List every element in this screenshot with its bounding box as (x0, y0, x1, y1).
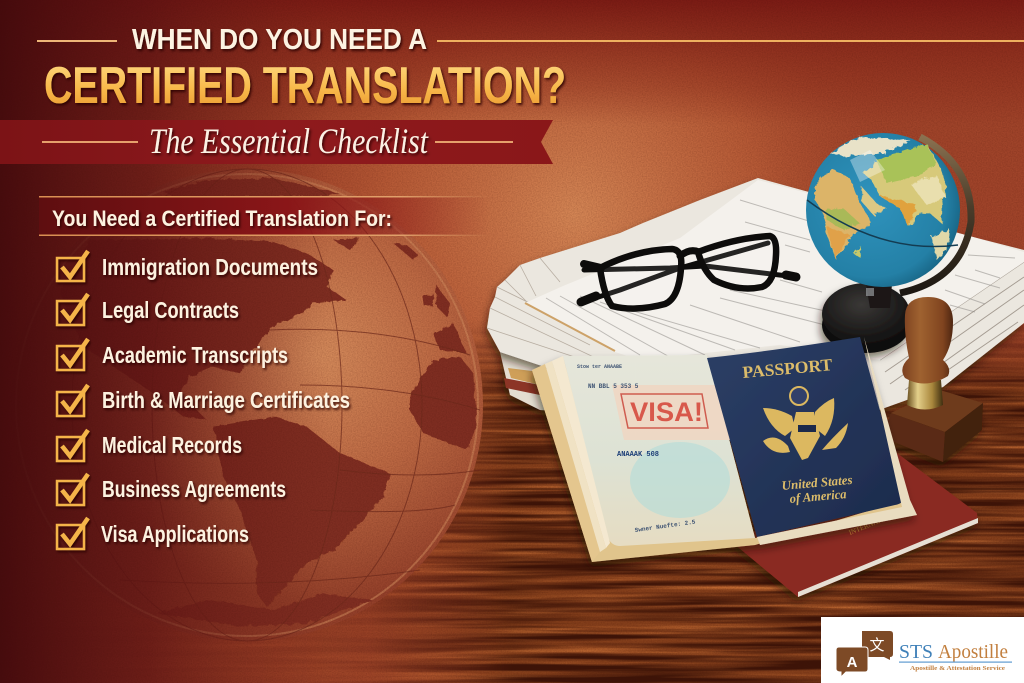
map grid lines (72, 169, 480, 641)
globe equator band (807, 200, 958, 247)
visa page labels: Swner Nuefte: 2.5 (634, 518, 696, 534)
item: immigration documents (57, 251, 318, 281)
sheet text lines (546, 200, 1015, 360)
globe sphere (806, 133, 960, 287)
visa page labels: Stow ter ANAABE (577, 364, 622, 370)
item: academic transcripts (57, 339, 288, 370)
open passport (532, 337, 917, 562)
item: birth and marriage certificates: Birth & Marriage Certificates (102, 387, 350, 413)
passport cover text: PASSPORT (742, 355, 834, 382)
visa page (563, 355, 755, 546)
stamp block (882, 390, 983, 462)
stamp ferrule (907, 380, 943, 410)
item: visa applications (57, 518, 249, 549)
item: visa applications: Visa Applications (101, 521, 249, 547)
visa page labels: ANAAAK 508 (617, 451, 659, 459)
left dark vignette (0, 0, 330, 683)
globe base and stem (822, 283, 910, 353)
fanned sheets (487, 178, 1024, 410)
logo wordmark: Apostille (938, 641, 1008, 663)
desk globe (806, 133, 971, 353)
red passport: INTERNATIONAL (848, 508, 903, 537)
stamp handle (902, 297, 953, 384)
logo wordmark: STS (899, 641, 933, 663)
page block (532, 355, 917, 562)
item: immigration documents: Immigration Documents (102, 254, 318, 280)
world map globe backdrop (11, 169, 483, 641)
background: wooden table (258, 328, 1024, 683)
ribbon with script subtitle (0, 120, 553, 164)
lower left paper stack (500, 345, 570, 412)
item: birth and marriage certificates (57, 385, 350, 416)
visa page labels (577, 364, 696, 534)
visa stamp: VISA! (630, 397, 703, 427)
title line two: CERTIFIED TRANSLATION? (44, 57, 566, 115)
item: academic transcripts: Academic Transcripts (102, 342, 288, 368)
passport cover text: United States (781, 472, 853, 493)
item: legal contracts (57, 294, 239, 325)
item: business agreements (57, 474, 286, 505)
passport cover text: of America (789, 486, 848, 506)
checklist (57, 251, 350, 549)
map continents (60, 178, 477, 627)
stack of documents (487, 178, 1024, 412)
red passport (733, 453, 978, 597)
globe ring (900, 137, 971, 293)
globe land masses (815, 137, 950, 260)
item: medical records (57, 430, 242, 461)
icon: translation speech bubbles: 文 (869, 637, 885, 654)
passport cover (707, 337, 903, 537)
visa page labels: NN BBL 5 353 5 (588, 383, 639, 390)
title line one: WHEN DO YOU NEED A (132, 24, 427, 56)
wooden stamp (882, 297, 983, 462)
title block (37, 24, 1024, 115)
item: legal contracts: Legal Contracts (102, 297, 239, 323)
logo panel (821, 617, 1024, 683)
checklist heading: You Need a Certified Translation For: (52, 206, 392, 231)
logo wordmark (899, 641, 1012, 672)
top sheet (525, 180, 1024, 360)
icon: translation speech bubbles (836, 631, 893, 677)
logo wordmark: Apostille & Attestation Service (910, 665, 1005, 672)
script subtitle: The Essential Checklist (149, 121, 429, 161)
passport cover text (742, 355, 853, 506)
item: business agreements: Business Agreements (102, 476, 286, 502)
eyeglasses (581, 236, 796, 309)
icon: translation speech bubbles: A (847, 654, 858, 671)
checklist heading band (39, 196, 490, 236)
icon: passport eagle emblem (763, 387, 848, 460)
item: medical records: Medical Records (102, 432, 242, 458)
